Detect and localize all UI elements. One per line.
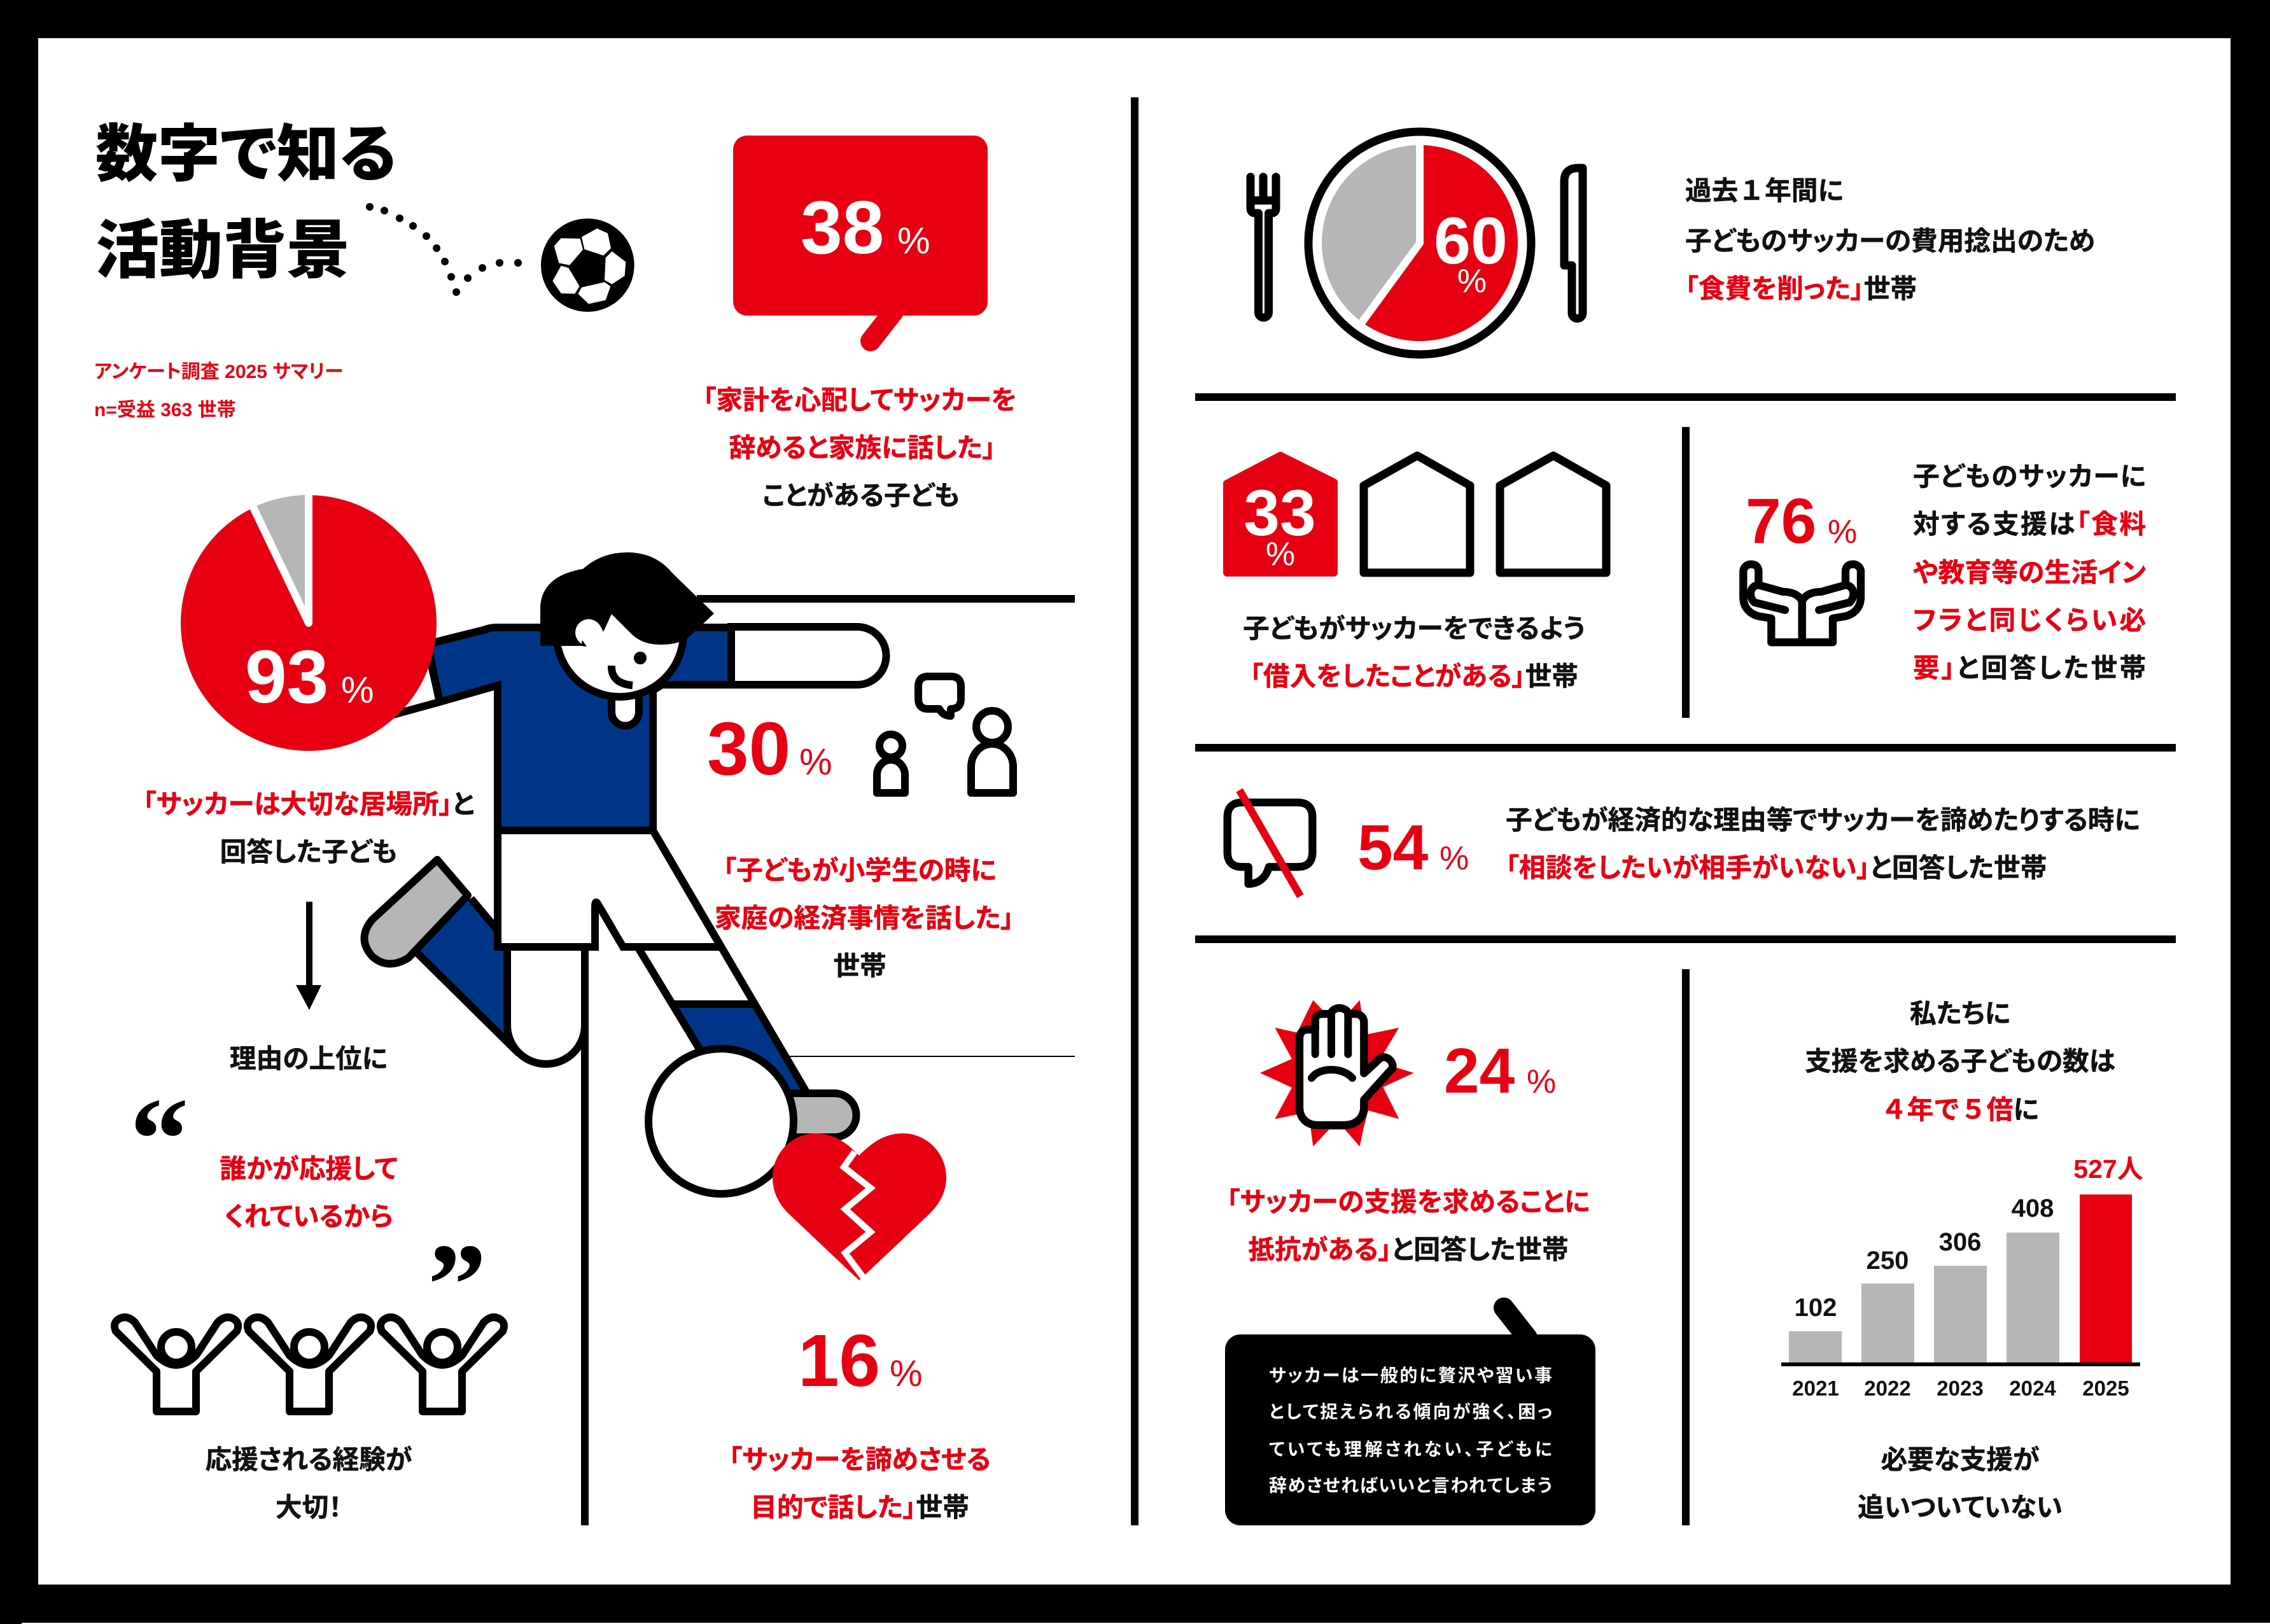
survey subtitle	[94, 361, 343, 421]
38 percent caption: ことがある子ども	[762, 480, 960, 510]
hair	[540, 552, 714, 646]
76 percent caption: フラと同じくらい必	[1913, 605, 2146, 635]
shorts	[498, 830, 721, 947]
24 percent value	[1444, 1035, 1556, 1107]
icon: red house: 33	[1244, 477, 1316, 549]
plate pie chart: %	[1457, 263, 1487, 300]
growth conclusion: 追いついていない	[1858, 1492, 2063, 1522]
panel: support growth	[1781, 998, 2143, 1522]
16 percent caption: 「サッカーを諦めさせる	[729, 1445, 991, 1474]
panel: 54 percent	[1228, 790, 2140, 896]
callout: black speech bubble	[1225, 1308, 1595, 1525]
bar chart: 250	[1867, 1247, 1909, 1275]
icon: fork	[1251, 177, 1276, 318]
face	[556, 570, 683, 697]
reason label: 理由の上位に	[230, 1044, 388, 1074]
plate pie chart	[1308, 132, 1531, 354]
30 percent value: %	[799, 741, 832, 783]
panel: 93 percent pie	[143, 490, 474, 819]
33 percent caption	[1243, 613, 1585, 691]
quote: reason: 誰かが応援して	[220, 1154, 398, 1184]
30 percent caption	[715, 855, 1014, 981]
icon: broken heart	[773, 1133, 946, 1280]
30 percent caption: 家庭の経済事情を話した」	[715, 903, 1014, 933]
30 percent caption: 「子どもが小学生の時に	[723, 855, 997, 885]
24 percent value: 24	[1444, 1035, 1515, 1107]
back leg sock	[414, 895, 519, 1053]
survey subtitle: n=受益 363 世帯	[94, 400, 236, 421]
front boot	[783, 1093, 857, 1137]
93 percent caption: 「サッカーは大切な居場所」と	[143, 789, 474, 819]
60 percent caption: 子どものサッカーの費用捻出のため	[1685, 226, 2095, 256]
callout: black speech bubble: ていても理解されない、子どもに	[1269, 1439, 1552, 1459]
38 percent caption: 「家計を心配してサッカーを	[703, 385, 1017, 415]
38 percent caption	[703, 385, 1017, 510]
icon: crossed speech bubble	[1228, 790, 1312, 896]
speech bubble: 38	[801, 186, 884, 270]
front leg outlines	[638, 830, 806, 1092]
bar chart: 408	[2012, 1194, 2054, 1222]
growth conclusion: 必要な支援が	[1881, 1445, 2040, 1474]
bar chart: 102	[1795, 1294, 1837, 1322]
eye	[634, 652, 647, 664]
bar chart: 306	[1939, 1228, 1981, 1256]
16 percent value	[798, 1319, 923, 1402]
76 percent value	[1746, 486, 1857, 557]
54 percent caption: 子どもが経済的な理由等でサッカーを諦めたりする時に	[1506, 805, 2140, 835]
panel: 76 percent	[1743, 461, 2146, 683]
back thigh	[507, 947, 585, 1064]
quote: reason	[130, 1074, 486, 1350]
pie chart: %	[341, 669, 374, 711]
growth heading: 私たちに	[1910, 998, 2010, 1028]
smile	[612, 666, 633, 685]
title: 数字で知る	[95, 119, 396, 189]
54 percent caption	[1506, 805, 2140, 883]
24 percent caption: 抵抗がある」と回答した世帯	[1248, 1235, 1569, 1264]
bar chart: 2024	[2009, 1376, 2056, 1400]
icon: outlined houses	[1364, 456, 1606, 573]
33 percent caption: 「借入をしたことがある」世帯	[1250, 661, 1578, 691]
76 percent caption: 子どものサッカーに	[1913, 461, 2146, 491]
76 percent caption: 対する支援は「食料	[1913, 509, 2146, 539]
bar chart: 527人	[2073, 1154, 2143, 1184]
panel: 24 percent	[1227, 1000, 1590, 1264]
30 percent caption: 世帯	[833, 951, 886, 981]
33 percent caption: 子どもがサッカーをできるよう	[1243, 613, 1585, 643]
arrow: down	[296, 902, 321, 1010]
collar	[612, 694, 639, 725]
bar chart: 2021	[1792, 1376, 1839, 1400]
icon: three cheering people	[115, 1317, 504, 1411]
54 percent caption: 「相談をしたいが相手がいない」と回答した世帯	[1506, 853, 2047, 883]
knee circle	[648, 1049, 794, 1194]
panel: 38 percent bubble	[703, 136, 1017, 510]
growth conclusion	[1858, 1445, 2063, 1522]
left forearm	[356, 643, 440, 718]
60 percent caption: 過去１年間に	[1685, 176, 1844, 206]
panel: 16 percent	[729, 1133, 991, 1522]
16 percent value: %	[890, 1353, 923, 1394]
title: 活動背景	[95, 215, 350, 286]
16 percent caption: 目的で話した」世帯	[750, 1492, 969, 1522]
growth heading	[1805, 998, 2115, 1124]
icon: red house	[1227, 456, 1334, 573]
76 percent caption	[1913, 461, 2146, 683]
back boot	[364, 860, 468, 964]
callout: black speech bubble: として捉えられる傾向が強く、困っ	[1269, 1401, 1552, 1422]
bar chart	[1781, 1154, 2143, 1400]
icon: red house: %	[1266, 536, 1295, 573]
speech bubble: %	[897, 220, 930, 262]
16 percent value: 16	[798, 1319, 880, 1402]
24 percent value: %	[1527, 1063, 1556, 1100]
30 percent value	[707, 707, 832, 791]
60 percent caption	[1685, 176, 2095, 304]
bar chart: 2023	[1937, 1376, 1984, 1400]
support message: 大切！	[276, 1492, 342, 1522]
76 percent value: 76	[1746, 486, 1816, 557]
76 percent value: %	[1828, 514, 1857, 550]
30 percent value: 30	[707, 707, 790, 791]
bar chart: 2022	[1864, 1376, 1911, 1400]
76 percent caption: 要」と回答した世帯	[1913, 653, 2146, 683]
38 percent caption: 辞めると家族に話した」	[729, 433, 995, 463]
icon: parent and child talking	[877, 676, 1013, 793]
60 percent caption: 「食費を削った」世帯	[1685, 274, 1917, 304]
pie chart: 93	[245, 635, 328, 719]
bar chart: 2025	[2082, 1376, 2129, 1400]
16 percent caption	[729, 1445, 991, 1522]
24 percent caption: 「サッカーの支援を求めることに	[1227, 1187, 1590, 1217]
illustration: soccer player kicking	[356, 552, 886, 1194]
panel: 30 percent	[707, 676, 1014, 981]
front leg upper	[638, 947, 754, 1004]
quote: reason: くれているから	[224, 1201, 393, 1231]
growth heading: ４年で５倍に	[1881, 1095, 2040, 1124]
growth heading: 支援を求める子どもの数は	[1805, 1046, 2115, 1076]
icon: soccer ball	[541, 218, 634, 312]
icon: raised hand with burst	[1260, 1000, 1414, 1147]
54 percent value: %	[1440, 840, 1469, 877]
76 percent caption: や教育等の生活イン	[1913, 557, 2146, 587]
caption continued: 回答した子ども	[220, 837, 397, 867]
54 percent value: 54	[1357, 812, 1429, 883]
title	[95, 119, 396, 286]
callout: black speech bubble: サッカーは一般的に贅沢や習い事	[1269, 1366, 1552, 1385]
panel: 60 percent plate	[1251, 132, 2095, 354]
support message	[206, 1445, 412, 1522]
54 percent value	[1357, 812, 1469, 883]
icon: open hands	[1743, 564, 1861, 642]
callout: black speech bubble: 辞めさせればいいと言われてしまう	[1269, 1476, 1552, 1495]
24 percent caption	[1227, 1187, 1590, 1264]
speech bubble	[733, 136, 988, 341]
right forearm	[731, 627, 886, 685]
ear	[575, 619, 602, 646]
plate pie chart: 60	[1434, 204, 1508, 278]
support message: 応援される経験が	[206, 1445, 412, 1474]
quote: reason: “	[130, 1074, 188, 1205]
shirt	[428, 627, 731, 830]
quote: reason: ”	[428, 1220, 486, 1350]
panel: 33 percent houses	[1227, 456, 1606, 691]
pie chart	[181, 490, 437, 751]
icon: knife	[1564, 168, 1583, 318]
front leg sock	[675, 1004, 806, 1107]
dotted ball trajectory	[366, 203, 522, 296]
survey subtitle: アンケート調査 2025 サマリー	[94, 361, 343, 382]
